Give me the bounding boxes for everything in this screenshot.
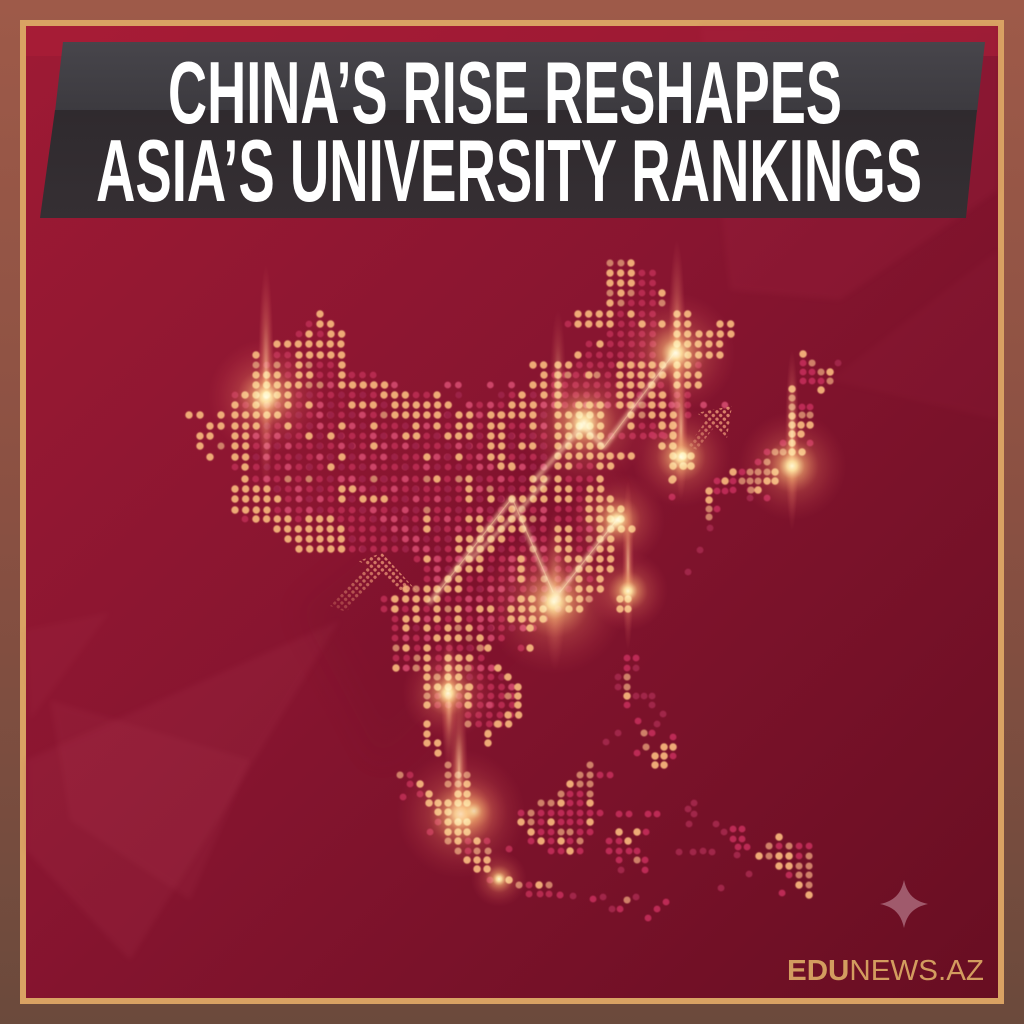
Borneo [521, 765, 610, 851]
icon: four-point sparkle [880, 880, 928, 928]
rising dotted arrow, Korea strait [688, 406, 732, 450]
title text [96, 43, 922, 220]
EDUNEWS.AZ watermark: EDUNEWS.AZ [787, 955, 984, 987]
base pink dots [235, 263, 721, 724]
pale peach dots [189, 263, 732, 753]
Malay peninsula and Sumatra [400, 765, 560, 895]
Java and Sulawesi and eastern islands [560, 803, 749, 918]
title banner [40, 42, 985, 220]
vertical light streaks [258, 240, 799, 845]
mid peach dots [221, 263, 662, 733]
thin trend line highlights [440, 352, 675, 592]
dotted map of China and Southeast Asia [189, 263, 838, 918]
Korea [652, 425, 691, 497]
New Guinea [759, 837, 809, 895]
darker pink variation [245, 395, 550, 677]
rising dotted arrow, west [330, 553, 416, 612]
Philippines [606, 658, 673, 765]
city glow lights [208, 240, 846, 907]
glow spots [208, 293, 846, 907]
Japan [688, 354, 838, 572]
rising trend lines [430, 352, 675, 602]
brighter pink highlights [235, 385, 735, 705]
